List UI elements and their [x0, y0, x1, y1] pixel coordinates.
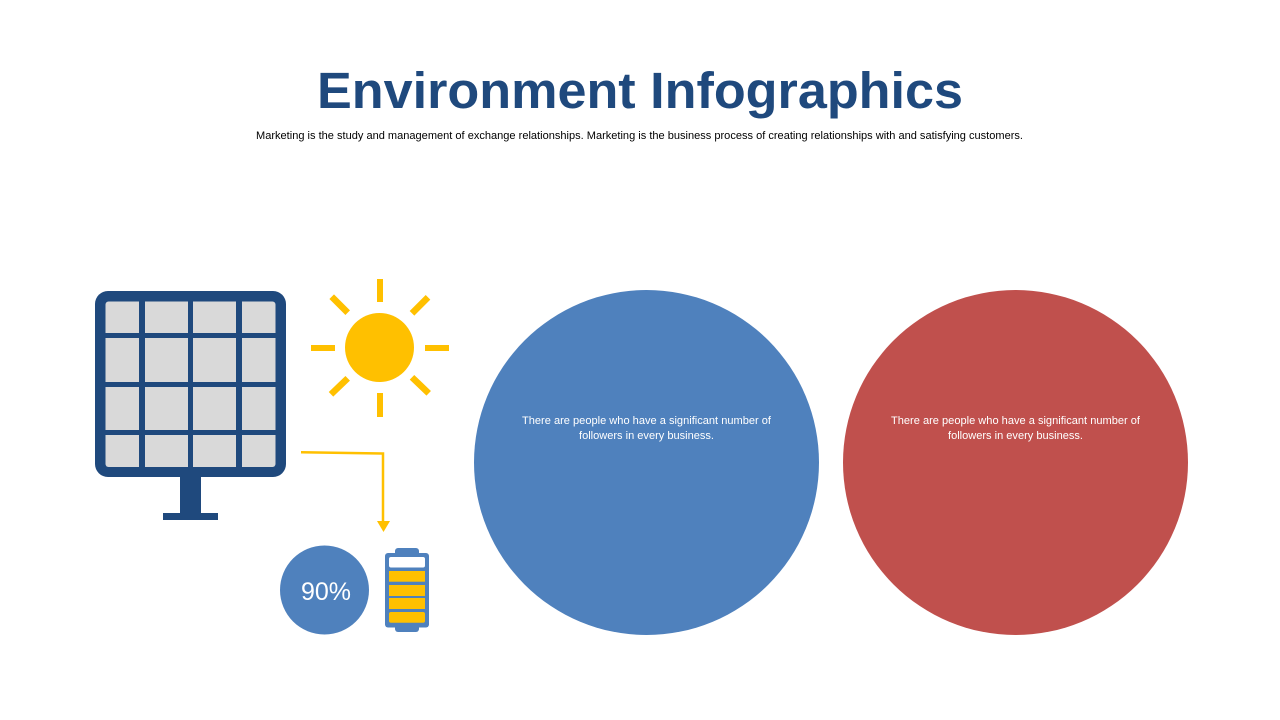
badge: 90%: [280, 546, 369, 634]
subtitle text: Marketing is the study and management of exchange relationships. Marketing is the business process of creating relationships with and satisfying customers.: [256, 130, 1023, 142]
panel glass: [106, 302, 276, 467]
panel grid lines: [106, 302, 276, 467]
panel frame: [95, 291, 286, 477]
icon: solar panel: [95, 291, 286, 520]
red circle text: [891, 415, 1141, 442]
icon: sun: [311, 279, 449, 417]
panel: red circle: [843, 290, 1188, 635]
panel: blue circle: [474, 290, 819, 635]
icon: battery: [385, 548, 429, 632]
blue circle text: There are people who have a significant number of: [522, 415, 772, 427]
badge: 90%: 90%: [301, 578, 351, 606]
title: Environment Infographics: [317, 62, 963, 119]
arrow: panel to battery: [301, 452, 390, 532]
panel stand: [163, 470, 218, 520]
red circle text: followers in every business.: [948, 430, 1083, 442]
red circle text: There are people who have a significant number of: [891, 415, 1141, 427]
blue circle text: followers in every business.: [579, 430, 714, 442]
blue circle text: [522, 415, 772, 442]
